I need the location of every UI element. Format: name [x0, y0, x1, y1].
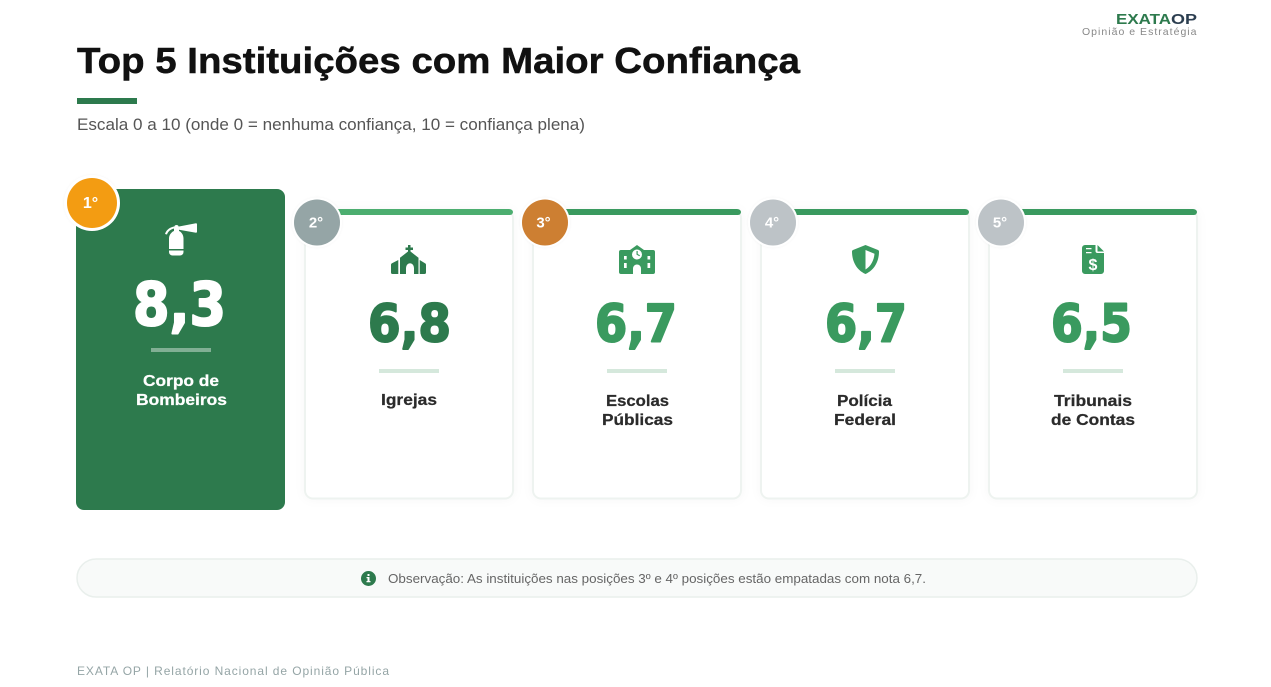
icon: info [361, 571, 376, 586]
label: Igrejas [381, 392, 437, 409]
label: Bombeiros [136, 392, 227, 409]
logo: OP [1171, 11, 1197, 28]
label: Tribunais [1054, 393, 1132, 410]
top bar [304, 209, 513, 215]
badge: 2nd place [292, 198, 342, 248]
divider [835, 369, 895, 373]
badge: 5th place: 5° [993, 214, 1007, 232]
label: Corpo de [143, 373, 219, 390]
panel: rank 5 Tribunais de Contas [988, 209, 1197, 498]
label [136, 373, 227, 409]
panel: rank 4 Polícia Federal [760, 209, 969, 498]
icon: fire extinguisher [165, 223, 197, 256]
score: 6,8 [368, 294, 451, 354]
label: Polícia [837, 393, 892, 410]
logo [1082, 11, 1197, 38]
panel: rank 1 Corpo de Bombeiros [76, 189, 285, 510]
label [1051, 393, 1135, 429]
label [602, 393, 673, 429]
badge: 2nd place: 2° [309, 214, 323, 232]
title: Top 5 Instituições com Maior Confiança [77, 40, 801, 81]
icon: invoice document: $ [1089, 257, 1098, 274]
callout: observation note: Observação: As instituições nas posições 3º e 4º posições estão empatadas com nota 6,7. [388, 571, 926, 586]
badge: 1st place [64, 175, 120, 231]
panel: rank 3 Escolas Públicas [532, 209, 741, 498]
footer: EXATA OP | Relatório Nacional de Opinião Pública [77, 664, 389, 678]
score: 8,3 [133, 270, 226, 340]
top bar [760, 209, 969, 215]
logo: Opinião e Estratégia [1082, 26, 1197, 38]
badge: 3rd place [520, 198, 570, 248]
callout: observation note [77, 559, 1197, 597]
label: Públicas [602, 412, 673, 429]
logo: EXATA [1116, 11, 1171, 28]
icon: invoice document [1082, 245, 1104, 274]
label [834, 393, 896, 429]
top bar [532, 209, 741, 215]
subtitle: Escala 0 a 10 (onde 0 = nenhuma confiança, 10 = confiança plena) [77, 116, 585, 134]
label: Federal [834, 412, 896, 429]
divider [607, 369, 667, 373]
divider [151, 348, 211, 352]
icon: shield [852, 245, 879, 274]
top bar [988, 209, 1197, 215]
badge: 4th place [748, 198, 798, 248]
badge: 1st place: 1° [83, 195, 98, 212]
panel: rank 2 Igrejas [304, 209, 513, 498]
divider [1063, 369, 1123, 373]
badge: 4th place: 4° [765, 214, 779, 232]
icon: church [391, 245, 426, 274]
title accent bar [77, 98, 137, 104]
divider [379, 369, 439, 373]
score: 6,7 [595, 294, 677, 354]
badge: 3rd place: 3° [536, 214, 551, 232]
badge: 5th place [976, 198, 1026, 248]
label: de Contas [1051, 412, 1135, 429]
score: 6,7 [825, 294, 907, 354]
score: 6,5 [1051, 294, 1132, 354]
icon: school [619, 245, 655, 274]
label: Escolas [606, 393, 669, 410]
